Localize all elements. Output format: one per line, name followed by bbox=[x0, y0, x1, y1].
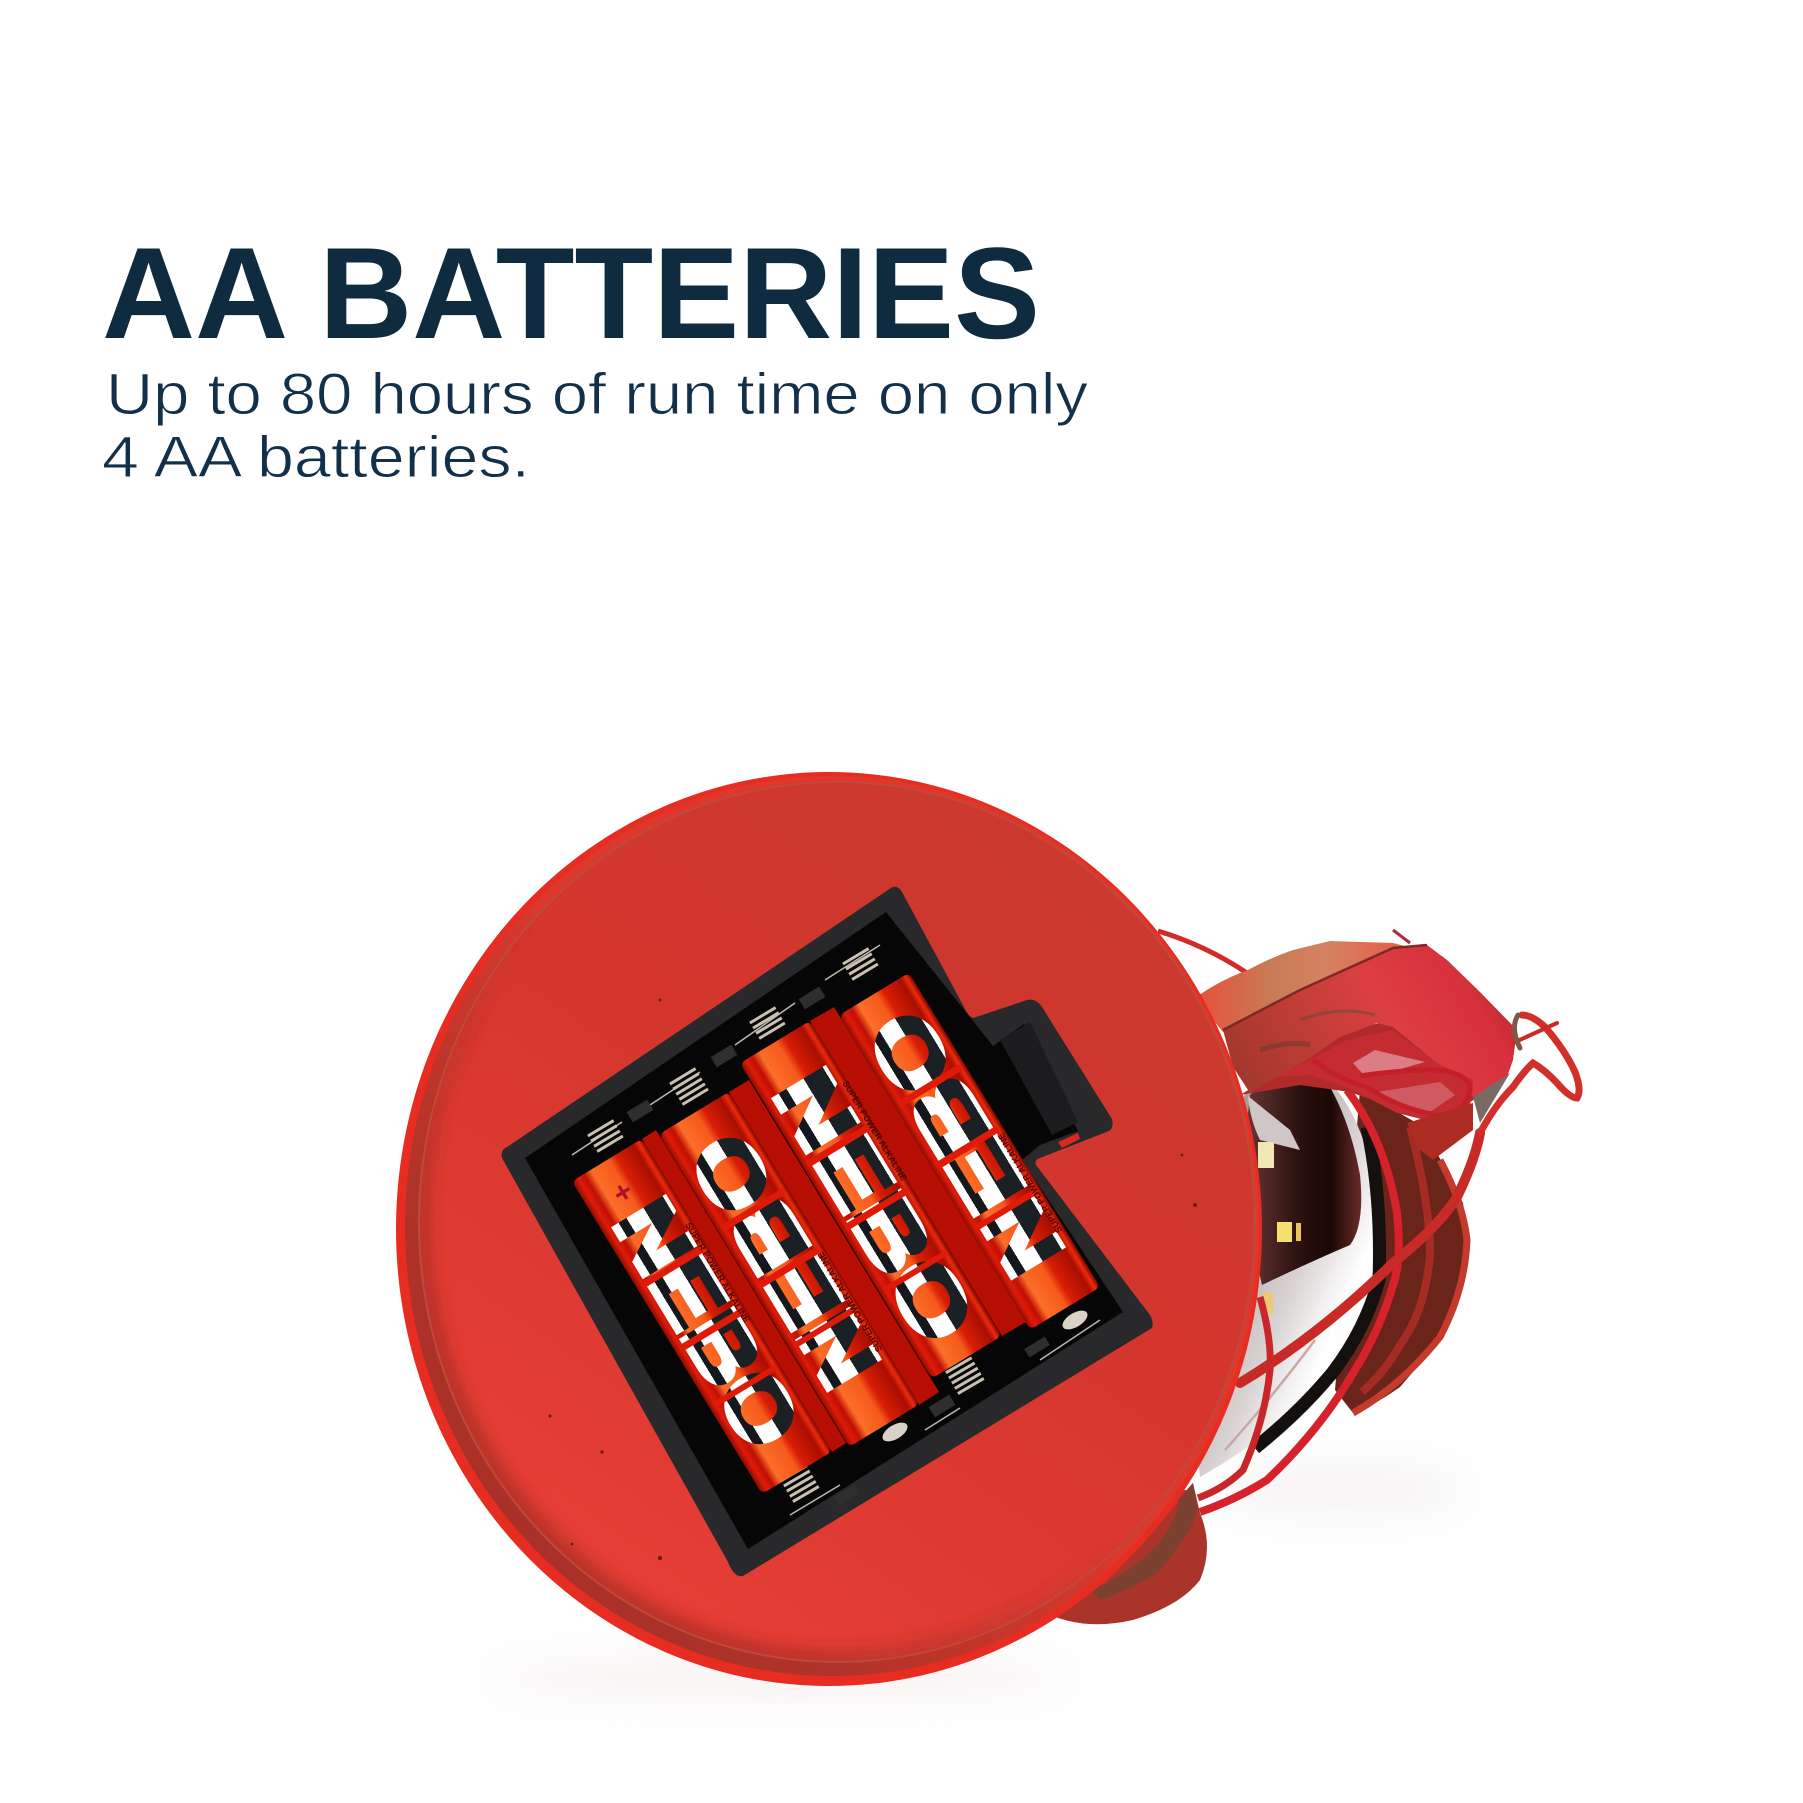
lantern body behind base bbox=[1040, 930, 1579, 1624]
battery 1: NEBO bbox=[595, 1183, 818, 1465]
contact plates bbox=[879, 1307, 1091, 1445]
battery 3: SUPER POWER ALKALINE bbox=[840, 1079, 909, 1183]
handle underside and wire loop bbox=[1277, 1030, 1510, 1160]
tray frame bbox=[502, 887, 1153, 1576]
contact lines bbox=[572, 945, 1100, 1515]
handle rust top bbox=[1195, 941, 1412, 1032]
battery tray bbox=[502, 887, 1153, 1576]
battery 1: SUPER POWER ALKALINE bbox=[683, 1221, 752, 1324]
handle strap bbox=[1223, 945, 1517, 1097]
battery 4: NEBO bbox=[849, 994, 1082, 1292]
title: AA BATTERIES bbox=[102, 220, 1040, 366]
LED lights bbox=[1258, 1142, 1301, 1314]
battery reflections in gaps bbox=[642, 1007, 1026, 1452]
black gasket bbox=[1255, 1127, 1380, 1448]
subtitle text bbox=[102, 362, 1088, 490]
globe highlight bbox=[1248, 1096, 1300, 1150]
subtitle text: 4 AA batteries. bbox=[102, 425, 530, 490]
top wire bbox=[1158, 931, 1247, 973]
handle backing bbox=[1240, 1020, 1480, 1125]
battery 2 bbox=[654, 1088, 926, 1450]
battery 3: NEBO bbox=[755, 1053, 993, 1360]
battery 3 bbox=[733, 1018, 1007, 1383]
dark globe reflection bbox=[1240, 1082, 1361, 1285]
subtitle text: Up to 80 hours of run time on only bbox=[106, 362, 1088, 427]
face specks bbox=[548, 999, 1197, 1560]
floor shadow bbox=[480, 1464, 1470, 1694]
face edge shading bbox=[420, 989, 1066, 1661]
glass globe bbox=[1180, 1078, 1380, 1477]
flat face bbox=[420, 783, 1254, 1661]
clip tabs bbox=[627, 987, 1050, 1506]
infographic canvas bbox=[104, 247, 1583, 1695]
battery 4 bbox=[834, 969, 1107, 1333]
rim inner step line bbox=[418, 781, 1256, 1663]
battery 4: SUPER POWER ALKALINE bbox=[996, 1131, 1064, 1235]
red cage wire front ring bbox=[1200, 1090, 1399, 1512]
red cage wire small bbox=[1198, 1297, 1270, 1498]
cage rings behind globe bbox=[1335, 1090, 1467, 1413]
tray well bbox=[525, 912, 1123, 1549]
shaded rim band bbox=[405, 776, 1259, 1676]
battery 1: + bbox=[607, 1174, 639, 1212]
diagonal cage wire and hook bbox=[1240, 1015, 1579, 1383]
foot bbox=[1040, 1483, 1207, 1624]
battery 2: NEBO bbox=[672, 1117, 898, 1404]
globe lower wisps bbox=[1225, 1340, 1315, 1450]
handle bbox=[1195, 941, 1517, 1125]
outer rim line bbox=[396, 772, 1262, 1686]
battery 1 bbox=[566, 1135, 838, 1498]
switch block bbox=[1000, 1022, 1078, 1135]
lantern base disk bbox=[396, 772, 1262, 1686]
battery 2: SUPER POWER ALKALINE bbox=[816, 1250, 884, 1354]
springs bbox=[600, 955, 972, 1496]
